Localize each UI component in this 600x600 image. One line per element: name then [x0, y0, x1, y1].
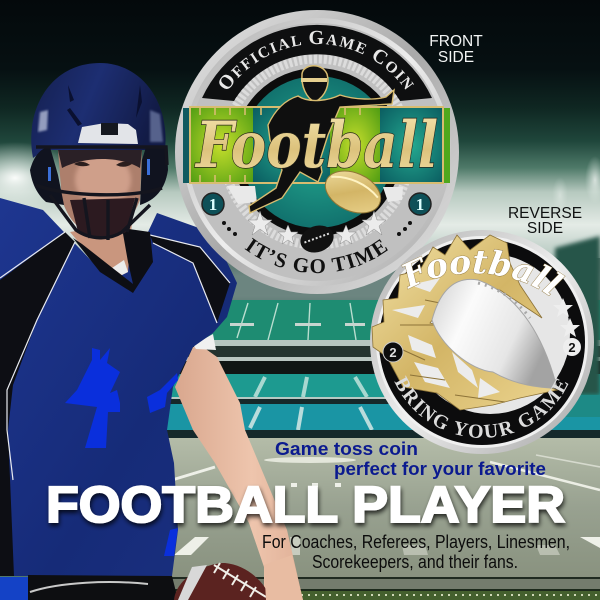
neck	[70, 222, 132, 278]
audience text: Scorekeepers, and their fans.	[312, 552, 518, 572]
green field strip	[183, 107, 450, 183]
hair shadow	[58, 150, 142, 168]
football field	[165, 438, 600, 600]
reverse side label: SIDE	[527, 220, 563, 237]
subtitle: perfect for your favorite	[334, 459, 546, 479]
reverse side coin	[370, 230, 594, 454]
coin rim	[370, 230, 594, 454]
right number badge: 1	[416, 195, 424, 214]
subtitle: Game toss coin	[275, 439, 418, 459]
audience text	[262, 532, 570, 572]
coin rim	[175, 10, 459, 294]
flame cut-outs	[392, 278, 500, 398]
silver football	[432, 279, 557, 388]
eyes	[74, 162, 132, 167]
tagline: it's go time: IT’S GO TIME	[244, 238, 388, 274]
helmet white front bumper	[78, 123, 138, 144]
stadium stands	[165, 236, 600, 438]
dot ornaments	[222, 221, 412, 236]
front side label: FRONT	[429, 33, 483, 50]
right arm	[175, 347, 303, 600]
inner frosted disc	[410, 254, 570, 414]
running player silhouette	[249, 66, 394, 213]
undershirt	[112, 260, 128, 275]
football in hand	[174, 563, 270, 600]
gold football	[319, 163, 387, 221]
bright blue patch: hip	[0, 577, 28, 600]
small football icon	[297, 221, 337, 257]
left number badge	[202, 193, 224, 215]
front side label: SIDE	[438, 49, 474, 66]
number badge right: 2	[568, 340, 576, 355]
tagline: bring your game: BRING YOUR GAME	[394, 376, 568, 438]
number badge right	[563, 338, 581, 356]
main heading: FOOTBALL PLAYER	[46, 476, 565, 533]
jersey	[0, 198, 237, 576]
jersey white piping	[0, 232, 230, 480]
face	[58, 150, 142, 235]
black text band	[202, 25, 432, 101]
number badge left: 2	[389, 345, 397, 360]
stars	[553, 298, 580, 337]
reverse side label: REVERSE	[508, 205, 582, 222]
teal medallion	[233, 68, 401, 236]
right number badge	[409, 193, 431, 215]
stars	[248, 211, 386, 244]
football player	[0, 63, 303, 600]
bright blue patch: side	[147, 373, 178, 413]
gold flames	[372, 235, 557, 410]
head and helmet	[30, 63, 168, 240]
subtitle	[275, 439, 546, 479]
helmet shell	[31, 63, 166, 158]
bright blue patch: chest	[65, 348, 120, 448]
facemask	[30, 147, 64, 205]
collar	[73, 228, 153, 293]
left number badge: 1	[209, 195, 217, 214]
title: official game coin: OFFICIAL GAME COIN	[219, 30, 414, 90]
hand	[264, 555, 303, 600]
football arc lettering: Football	[402, 248, 566, 296]
number badge left	[383, 342, 403, 362]
jersey black shoulder panels	[0, 232, 75, 576]
front side coin	[175, 10, 459, 294]
frosted diamonds	[227, 186, 257, 204]
shorts	[28, 575, 178, 600]
sleeve undershirt	[193, 334, 216, 350]
football script lettering: Football	[194, 108, 438, 183]
